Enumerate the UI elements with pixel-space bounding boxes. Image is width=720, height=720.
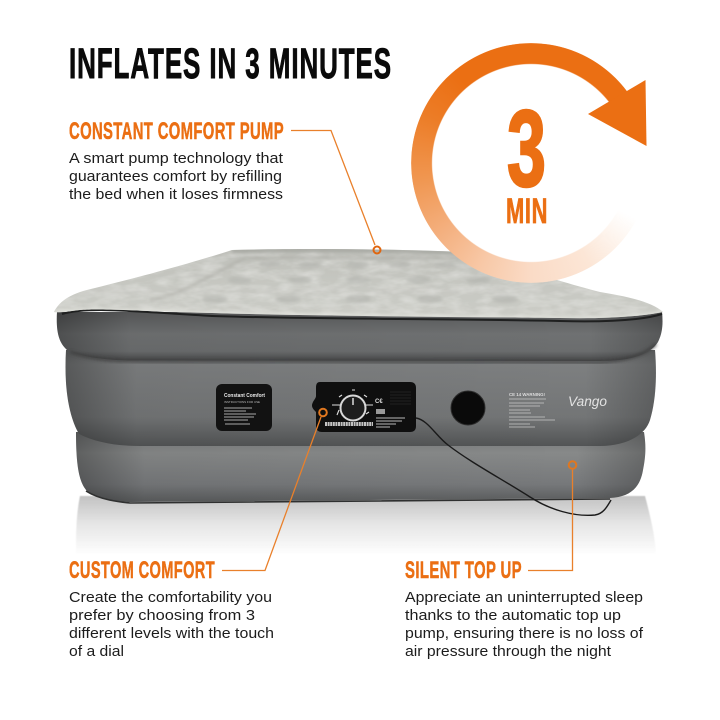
min label: MIN (506, 192, 548, 231)
power cable (416, 418, 611, 515)
instructions label panel (216, 384, 272, 431)
body text: pump, ensuring there is no loss of (405, 625, 644, 642)
leader line: custom comfort (222, 409, 327, 570)
body text (69, 589, 274, 660)
block: constant comfort pump (69, 118, 284, 203)
body text: Create the comfortability you (69, 589, 272, 606)
middle tier (66, 350, 656, 446)
circular arrow ring (411, 43, 651, 283)
instructions label panel: Constant Comfort (224, 393, 265, 399)
warning label text: CE 14 WARNING! (509, 392, 545, 398)
heading: CUSTOM COMFORT (69, 557, 215, 584)
floor reflection (76, 496, 656, 555)
arrow head (588, 80, 646, 146)
top dark piping (62, 310, 662, 321)
heading: SILENT TOP UP (405, 557, 522, 584)
body text: prefer by choosing from 3 (69, 607, 255, 624)
body text: the bed when it loses firmness (69, 186, 283, 203)
block: custom comfort (69, 557, 274, 660)
title: INFLATES IN 3 MINUTES (69, 40, 392, 88)
body text: of a dial (69, 643, 124, 660)
leader line: constant comfort pump (291, 130, 380, 254)
lower tier (76, 432, 645, 503)
number 3: 3 (507, 88, 546, 210)
body text: A smart pump technology that (69, 150, 284, 167)
body text: air pressure through the night (405, 643, 612, 660)
Vango logo: Vango (568, 394, 607, 409)
body text (69, 150, 284, 203)
heading: CONSTANT COMFORT PUMP (69, 118, 284, 145)
body text (405, 589, 644, 660)
warning label text (509, 392, 555, 427)
round valve port (451, 391, 485, 425)
instructions label panel: INSTRUCTIONS FOR USE (224, 400, 260, 404)
block: silent top up (405, 557, 644, 660)
body text: Appreciate an uninterrupted sleep (405, 589, 643, 606)
surface tufts (54, 250, 663, 318)
pump control panel (312, 382, 416, 432)
airbed product illustration (54, 48, 663, 659)
body text: thanks to the automatic top up (405, 607, 621, 624)
upper tier (57, 312, 663, 362)
pump control panel: C€ (375, 399, 383, 405)
body text: guarantees comfort by refilling (69, 168, 282, 185)
body text: different levels with the touch (69, 625, 274, 642)
dial (332, 390, 373, 420)
leader line: silent top up (528, 461, 576, 570)
flocked top surface (54, 249, 663, 318)
